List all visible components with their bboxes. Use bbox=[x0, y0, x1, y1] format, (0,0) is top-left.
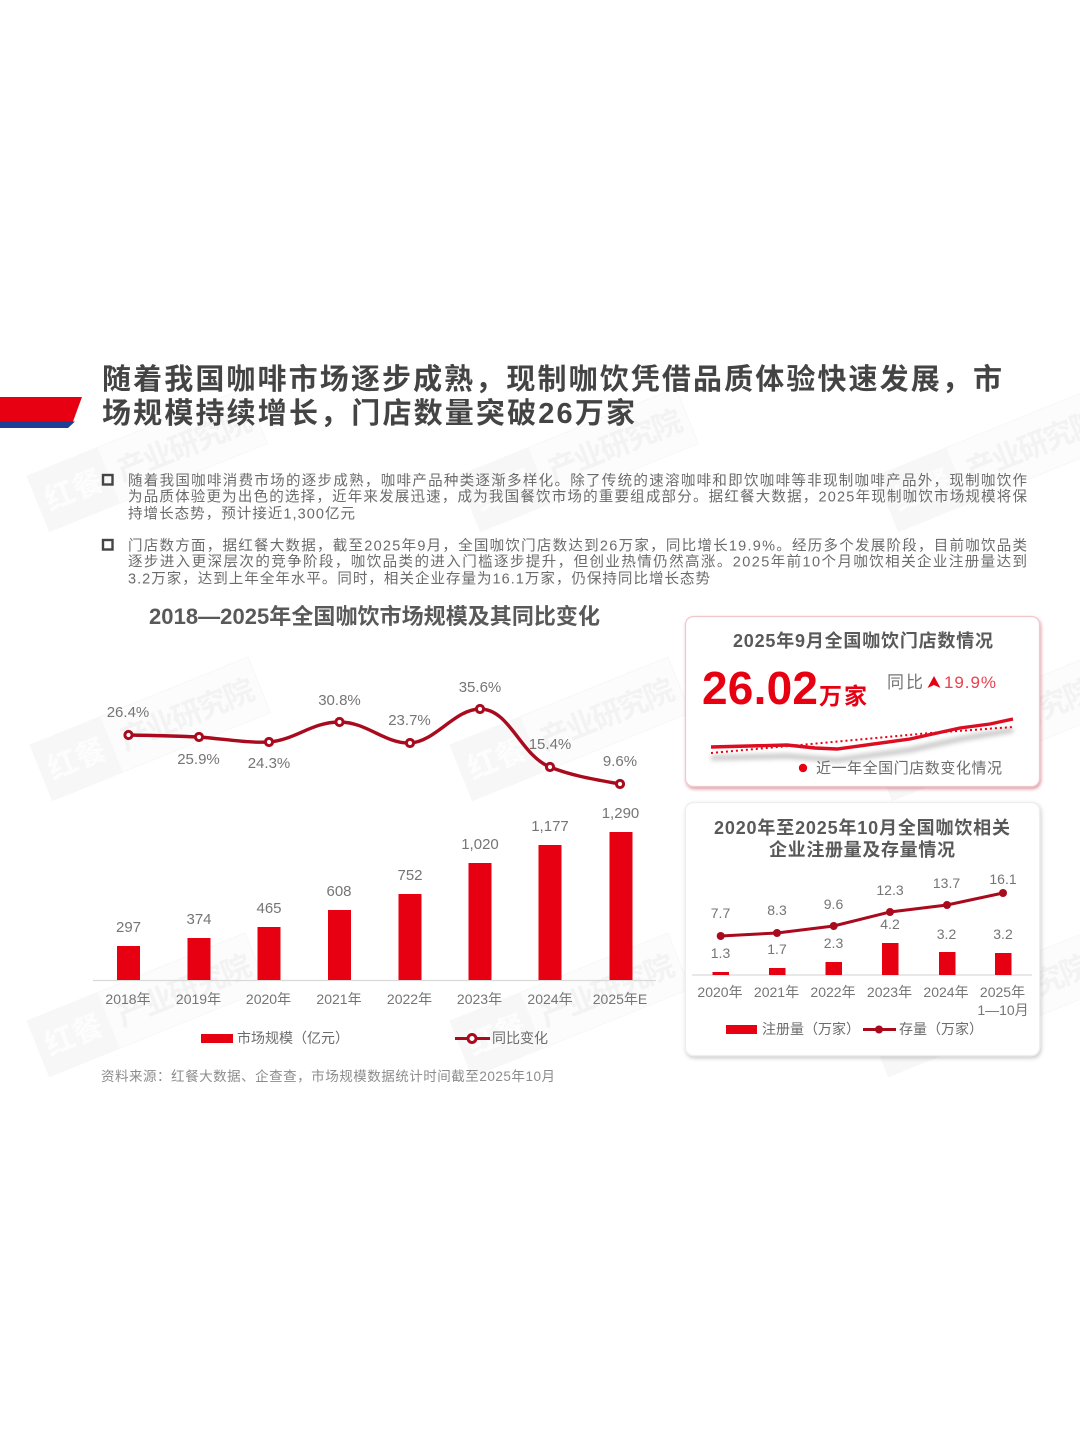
line chart: stock: 13.7 bbox=[933, 875, 960, 891]
line chart: year-on-year change: 30.8% bbox=[318, 692, 361, 709]
bar chart: market size: 2018年 bbox=[105, 991, 151, 1007]
legend: market chart bbox=[201, 1030, 548, 1046]
line chart: year-on-year change bbox=[107, 679, 637, 788]
source note: 资料来源：红餐大数据、企查查，市场规模数据统计时间截至2025年10月 bbox=[101, 1068, 555, 1084]
bar chart: registrations bbox=[692, 916, 1032, 975]
axis labels: 2020年 bbox=[697, 984, 743, 1000]
panel heading bbox=[714, 817, 1010, 860]
bar chart: market size bbox=[93, 805, 656, 1007]
panel heading: 企业注册量及存量情况 bbox=[769, 839, 955, 860]
line chart: year-on-year change: 26.4% bbox=[107, 704, 149, 721]
bar chart: market size: 1,177 bbox=[531, 818, 569, 835]
bar chart: registrations: 1.3 bbox=[711, 945, 730, 961]
year-on-year growth bbox=[887, 673, 996, 692]
bar chart: market size: 2025年E bbox=[593, 991, 647, 1007]
icon: red and blue title ribbon bbox=[0, 397, 82, 428]
bar chart: market size: 2023年 bbox=[457, 991, 502, 1007]
sparkline: store trend bbox=[711, 719, 1013, 760]
axis labels: 2025年 bbox=[980, 984, 1025, 1000]
bar chart: market size: 465 bbox=[256, 900, 282, 917]
text block: market paragraph: 持增长态势，预计接近1,300亿元 bbox=[128, 506, 355, 522]
bar chart: market size: 2020年 bbox=[246, 991, 291, 1007]
axis labels: 2024年 bbox=[923, 984, 969, 1000]
title: 随着我国咖啡市场逐步成熟，现制咖饮凭借品质体验快速发展，市 bbox=[102, 363, 1002, 396]
legend: registrations and stock bbox=[726, 1021, 983, 1037]
line chart: stock: 12.3 bbox=[876, 882, 904, 898]
text block: stores paragraph: 逐步进入更深层次的竞争阶段，咖饮品类的进入门槛逐步提升，但创业热情仍然高涨。2025年前10个月咖饮相关企业注册量达到 bbox=[128, 552, 1027, 570]
year-on-year growth: 同比 bbox=[887, 673, 923, 692]
legend: registrations and stock: 存量（万家） bbox=[899, 1021, 983, 1037]
axis labels: 1—10月 bbox=[977, 1002, 1029, 1018]
axis labels: 2022年 bbox=[810, 984, 856, 1000]
big number: 万家 bbox=[819, 683, 867, 709]
chart heading: market size: 2018—2025年全国咖饮市场规模及其同比变化 bbox=[149, 604, 600, 629]
axis labels: 2021年 bbox=[754, 984, 799, 1000]
bar chart: market size: 1,290 bbox=[602, 805, 639, 822]
legend: sparkline: 近一年全国门店数变化情况 bbox=[816, 759, 1002, 777]
bar chart: registrations: 2.3 bbox=[824, 935, 843, 951]
bar chart: market size: 2019年 bbox=[176, 991, 221, 1007]
year-on-year growth: 19.9% bbox=[944, 673, 996, 692]
bar chart: registrations: 3.2 bbox=[937, 926, 956, 942]
bar chart: market size: 608 bbox=[326, 883, 352, 900]
bar chart: registrations: 3.2 bbox=[993, 926, 1013, 942]
bar chart: market size: 1,020 bbox=[461, 836, 499, 853]
panel: store count: 2025年9月全国咖饮门店数情况 bbox=[733, 630, 993, 651]
text block: stores paragraph: 3.2万家，达到上年全年水平。同时，相关企业存量为16.1万家，仍保持同比增长态势 bbox=[128, 570, 710, 588]
legend: registrations and stock: 注册量（万家） bbox=[762, 1021, 860, 1037]
line chart: stock: 16.1 bbox=[989, 871, 1017, 887]
text block: market paragraph bbox=[103, 472, 1028, 522]
line chart: year-on-year change: 23.7% bbox=[388, 712, 431, 729]
line chart: year-on-year change: 25.9% bbox=[177, 751, 220, 768]
big number: 26.02 bbox=[702, 662, 818, 714]
text block: stores paragraph: 门店数方面，据红餐大数据，截至2025年9月，全国咖饮门店数达到26万家，同比增长19.9%。经历多个发展阶段，目前咖饮品类 bbox=[128, 536, 1027, 554]
bar chart: registrations: 4.2 bbox=[880, 916, 900, 932]
line chart: stock: 9.6 bbox=[824, 896, 843, 912]
axis labels: 2023年 bbox=[867, 984, 912, 1000]
line chart: year-on-year change: 9.6% bbox=[603, 753, 637, 770]
bar chart: market size: 752 bbox=[397, 867, 423, 884]
title bbox=[102, 363, 1002, 430]
line chart: stock bbox=[711, 871, 1017, 940]
bar chart: market size: 297 bbox=[116, 919, 141, 936]
line chart: stock: 7.7 bbox=[711, 905, 730, 921]
line chart: year-on-year change: 35.6% bbox=[459, 679, 501, 696]
line chart: year-on-year change: 15.4% bbox=[529, 736, 571, 753]
bar chart: market size: 374 bbox=[186, 911, 212, 928]
bar chart: market size: 2022年 bbox=[387, 991, 432, 1007]
text block: market paragraph: 为品质体验更为出色的选择，近年来发展迅速，成为我国餐饮市场的重要组成部分。据红餐大数据，2025年现制咖饮市场规模将保 bbox=[128, 488, 1028, 506]
bar chart: market size: 2021年 bbox=[316, 991, 362, 1007]
text block: stores paragraph bbox=[103, 536, 1027, 588]
panel heading: 2020年至2025年10月全国咖饮相关 bbox=[714, 817, 1010, 838]
axis labels bbox=[697, 984, 1029, 1018]
panel: store count bbox=[686, 616, 1040, 786]
bar chart: market size: 2024年 bbox=[527, 991, 573, 1007]
line chart: year-on-year change: 24.3% bbox=[248, 755, 290, 772]
legend: market chart: 同比变化 bbox=[492, 1030, 548, 1046]
line chart: stock: 8.3 bbox=[767, 902, 787, 918]
panel: registrations and stock bbox=[686, 802, 1040, 1056]
text block: market paragraph: 随着我国咖啡消费市场的逐步成熟，咖啡产品种类逐渐多样化。除了传统的速溶咖啡和即饮咖啡等非现制咖啡产品外，现制咖饮作 bbox=[128, 472, 1027, 490]
title: 场规模持续增长，门店数量突破26万家 bbox=[102, 397, 635, 430]
bar chart: registrations: 1.7 bbox=[767, 941, 787, 957]
legend: market chart: 市场规模（亿元） bbox=[237, 1030, 349, 1046]
